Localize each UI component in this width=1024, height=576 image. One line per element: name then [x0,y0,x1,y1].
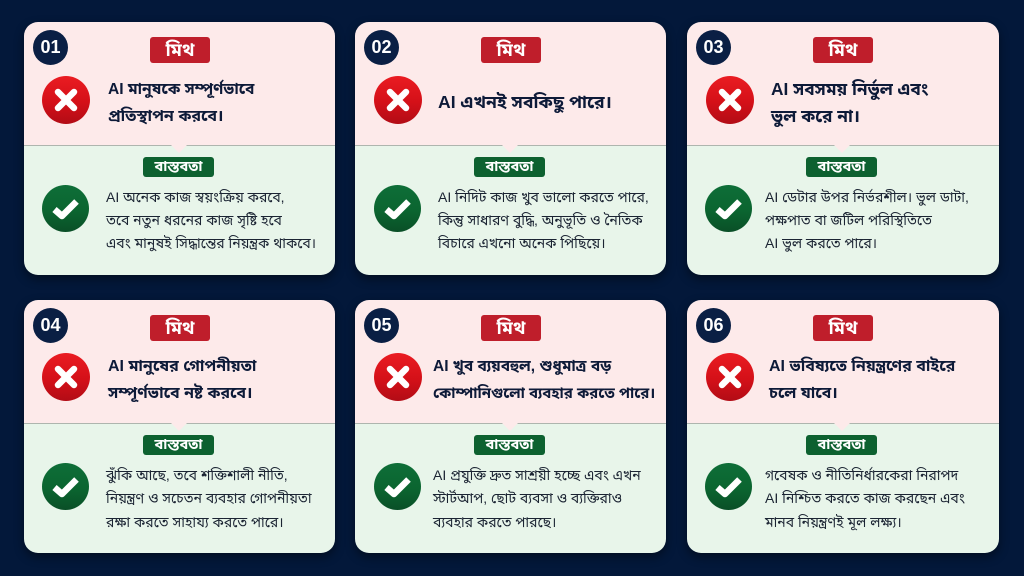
reality label: বাস্তবতা [486,437,533,453]
reality text: ঝুঁকি আছে, তবে শক্তিশালী নীতি, [106,466,288,482]
myth statement: ভুল করে না। [771,106,860,126]
icon: green check [705,463,752,510]
reality text: বিচারে এখনো অনেক পিছিয়ে। [438,234,606,250]
reality text: AI নিশ্চিত করতে কাজ করছেন এবং [765,490,965,506]
icon: green check [42,463,89,510]
reality text: রক্ষা করতে সাহায্য করতে পারে। [106,514,283,530]
panel: myth 02 [355,22,666,275]
number badge 03: 03 [703,36,724,56]
myth label: মিথ [497,40,525,60]
reality text [765,188,969,252]
number badge 01: 01 [40,36,61,56]
reality text [106,466,312,530]
myth label [813,315,873,341]
panel: myth 03 [687,22,999,275]
myth statement: AI সবসময় নির্ভুল এবং [771,78,929,98]
myth label [481,37,541,63]
reality text: তবে নতুন ধরনের কাজ সৃষ্টি হবে [106,212,282,228]
reality text: AI অনেক কাজ স্বয়ংক্রিয় করবে, [106,188,285,204]
panel: myth 06 [687,300,999,553]
myth statement [770,78,929,127]
myth statement [108,356,257,402]
reality text: AI ভুল করতে পারে। [765,234,877,250]
reality text: ব্যবহার করতে পারছে। [433,514,556,530]
reality text: স্টার্টআপ, ছোট ব্যবসা ও ব্যক্তিরাও [433,490,622,506]
reality text: AI প্রযুক্তি দ্রুত সাশ্রয়ী হচ্ছে এবং এখন [433,466,641,482]
myth statement: AI মানুষের গোপনীয়তা [108,358,256,375]
reality text: গবেষক ও নীতিনির্ধারকেরা নিরাপদ [765,466,958,482]
number badge 06 [696,308,731,342]
reality text [432,466,641,530]
icon: red cross [706,76,754,124]
myth statement: AI এখনই সবকিছু পারে। [438,92,612,112]
number badge 04 [33,308,68,342]
icon: green check [705,185,752,232]
reality text [764,466,965,530]
myth statement: চলে যাবে। [769,384,838,402]
myth statement: সম্পূর্ণভাবে নষ্ট করবে। [108,384,253,402]
icon: green check [374,463,421,510]
myth label [150,37,210,63]
myth statement [768,356,956,402]
reality label: বাস্তবতা [155,159,202,175]
number badge 02 [364,30,399,64]
myth statement: AI ভবিষ্যতে নিয়ন্ত্রণের বাইরে [769,358,955,375]
reality label [474,435,545,455]
reality text: মানব নিয়ন্ত্রণই মূল লক্ষ্য। [765,514,902,530]
myth statement: AI খুব ব্যয়বহুল, শুধুমাত্র বড় [433,358,611,375]
number badge 04: 04 [40,314,61,334]
myth statement: প্রতিস্থাপন করবে। [108,108,224,124]
myth statement: AI মানুষকে সম্পূর্ণভাবে [108,80,254,98]
icon: red cross [42,76,90,124]
reality text [438,188,649,250]
reality label [806,435,877,455]
myth label [813,37,873,63]
reality label: বাস্তবতা [818,437,865,453]
panel: myth 04 [24,300,335,553]
icon: green check [374,185,421,232]
reality label [474,157,545,177]
myth label: মিথ [829,40,857,60]
reality label: বাস্তবতা [486,159,533,175]
reality label [143,157,214,177]
myth label [481,315,541,341]
reality label [143,435,214,455]
icon: green check [42,185,89,232]
reality text: পক্ষপাত বা জটিল পরিস্থিতিতে [765,212,932,228]
icon: red cross [706,353,754,401]
reality label [806,157,877,177]
myth statement [433,358,655,402]
number badge 02: 02 [371,36,392,56]
reality label: বাস্তবতা [155,437,202,453]
reality text: AI ডেটার উপর নির্ভরশীল। ভুল ডাটা, [765,188,969,204]
number badge 01 [33,30,68,64]
myth statement [108,80,255,124]
reality text: এবং মানুষই সিদ্ধান্তের নিয়ন্ত্রক থাকবে। [106,234,316,250]
reality text [106,188,316,252]
reality label: বাস্তবতা [818,159,865,175]
icon: red cross [374,76,422,124]
panel: myth 01 [24,22,335,275]
myth label: মিথ [497,318,525,338]
number badge 05: 05 [371,314,392,334]
icon: red cross [42,353,90,401]
number badge 05 [364,308,399,342]
myth label: মিথ [829,318,857,338]
icon: red cross [374,353,422,401]
number badge 06: 06 [703,314,724,334]
reality text: কিন্তু সাধারণ বুদ্ধি, অনুভূতি ও নৈতিক [438,212,643,228]
panel: myth 05 [355,300,666,553]
myth label [150,315,210,341]
myth label: মিথ [166,40,194,60]
reality text: নিয়ন্ত্রণ ও সচেতন ব্যবহার গোপনীয়তা [106,490,312,506]
number badge 03 [696,30,731,64]
myth label: মিথ [166,318,194,338]
myth statement: কোম্পানিগুলো ব্যবহার করতে পারে। [433,384,655,402]
reality text: AI নিদিট কাজ খুব ভালো করতে পারে, [438,188,649,204]
